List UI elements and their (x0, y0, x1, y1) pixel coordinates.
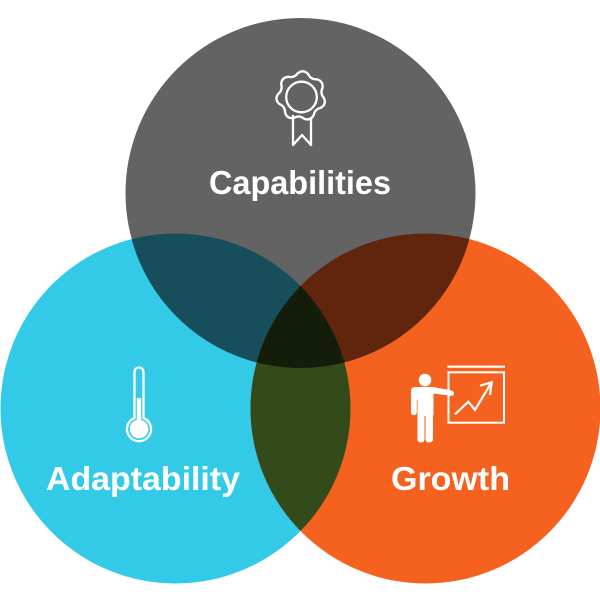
label: adaptability: Adaptability (46, 460, 241, 497)
circle: growth (250, 234, 600, 584)
overlap: centre (256, 286, 344, 368)
overlap: capabilities and growth (256, 234, 470, 362)
icon: thermometer (127, 368, 151, 441)
icon: presenter with growth chart (411, 367, 505, 442)
rising arrow (455, 382, 492, 414)
label: growth: Growth (391, 460, 510, 497)
icon: award rosette (276, 71, 325, 145)
circle: adaptability (0, 234, 350, 584)
overlap: adaptability and growth (250, 286, 350, 531)
label: capabilities: Capabilities (209, 164, 391, 201)
circle: capabilities (126, 18, 476, 368)
overlap: capabilities and adaptability (132, 234, 300, 362)
presentation board (447, 367, 505, 423)
presenter figure (411, 374, 454, 442)
